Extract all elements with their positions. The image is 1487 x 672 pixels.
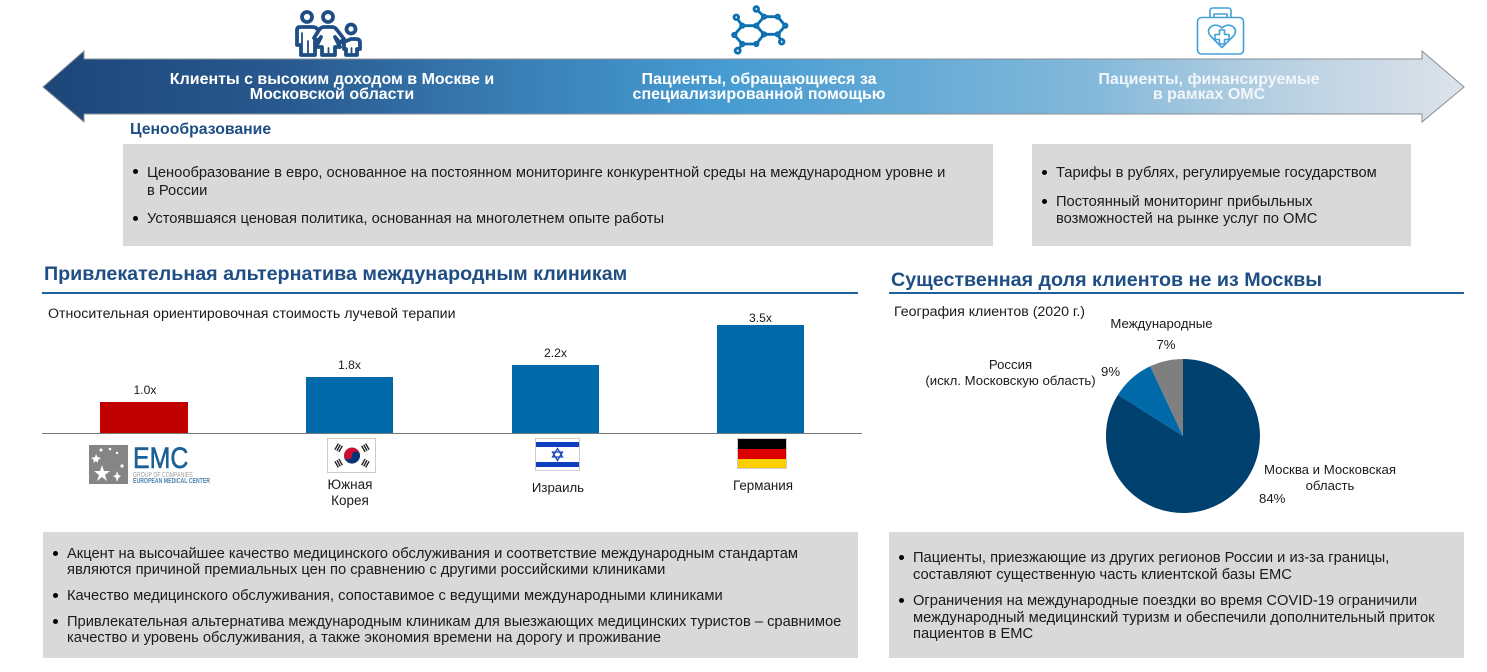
- bullet: monitoring: Постоянный мониторинг прибыльных: [1056, 194, 1313, 210]
- panel: pricing left: [123, 144, 993, 246]
- arrow label: OMS: Пациенты, финансируемые: [1098, 70, 1320, 88]
- pie chart: [1106, 359, 1260, 513]
- segment arrow: [42, 50, 1465, 123]
- value: South Korea: 1.8x: [338, 358, 361, 372]
- bullet: tourists: [67, 614, 841, 646]
- label: South Korea: Корея: [331, 493, 369, 508]
- bullet: euro pricing: [147, 164, 945, 200]
- value: Germany: 3.5x: [749, 311, 772, 325]
- logo: EMC: EMC: [132, 442, 188, 475]
- heading rule right: [889, 292, 1464, 294]
- slice: Moscow 84%: [1106, 359, 1260, 513]
- bullet: euro pricing: в России: [147, 183, 207, 199]
- bullet: comparable: Качество медицинского обслуживания, сопоставимое с ведущими международными клиниками: [67, 588, 723, 604]
- arrow label: specialised care: [633, 70, 885, 102]
- heading rule left: [42, 292, 858, 294]
- bullet: premium: являются причиной премиальных цен по сравнению с другими российскими клиниками: [67, 562, 665, 578]
- bullet: tariffs: Тарифы в рублях, регулируемые государством: [1056, 165, 1377, 181]
- label: Russia: Россия: [989, 357, 1032, 372]
- slice: International 7%: [1150, 359, 1183, 436]
- bar: Israel: [512, 365, 599, 433]
- value: international: 7%: [1156, 337, 1176, 352]
- bullet: covid: пациентов в ЕМС: [913, 626, 1033, 642]
- arrow label: high income: Клиенты с высоким доходом в Москве и: [170, 70, 494, 88]
- chart subtitle: geography: География клиентов (2020 г.): [894, 304, 1085, 320]
- icon: molecule: [731, 5, 788, 55]
- label: Germany: Германия: [733, 478, 793, 493]
- panel: pricing right: [1032, 144, 1411, 246]
- bullet: covid: [913, 593, 1435, 642]
- heading: alternative to international clinics: Привлекательная альтернатива международным клиникам: [44, 263, 627, 285]
- label: Israel: Израиль: [532, 480, 584, 495]
- heading: pricing: Ценообразование: [130, 121, 271, 138]
- value: EMC: 1.0x: [133, 383, 157, 397]
- bar: Germany: [717, 325, 804, 433]
- bullet: regions: [913, 550, 1389, 583]
- bullet: euro pricing: Ценообразование в евро, основанное на постоянном мониторинге конкурентной среды на международном уровне и: [147, 165, 945, 181]
- bullet: premium: [67, 546, 798, 578]
- bullet: regions: составляют существенную часть клиентской базы ЕМС: [913, 566, 1292, 582]
- chart subtitle: Относительная ориентировочная стоимость лучевой терапии: [48, 306, 456, 322]
- icon: family: [295, 10, 362, 57]
- bullet: monitoring: возможностей на рынке услуг по ОМС: [1056, 211, 1317, 227]
- value: Israel: 2.2x: [544, 346, 567, 360]
- bar chart: [42, 325, 862, 434]
- bullet: monitoring: [1056, 194, 1317, 228]
- heading: non-Moscow clients: Существенная доля клиентов не из Москвы: [891, 269, 1322, 291]
- bullet: established pricing: Устоявшаяся ценовая политика, основанная на многолетнем опыте работы: [147, 211, 664, 227]
- slice: Russia 9%: [1118, 366, 1183, 436]
- arrow label: high income: Московской области: [250, 86, 414, 102]
- flag: South Korea: [327, 438, 376, 473]
- panel: client notes: [889, 532, 1464, 658]
- panel: quality notes: [43, 532, 858, 658]
- arrow label: specialised care: специализированной помощью: [633, 86, 885, 102]
- label: Moscow: область: [1306, 478, 1354, 493]
- label: South Korea: [328, 477, 372, 508]
- logo: EMC: EUROPEAN MEDICAL CENTER: [133, 478, 210, 485]
- bullet: tourists: Привлекательная альтернатива международным клиникам для выезжающих медицинских туристов – сравнимое: [67, 614, 841, 630]
- logo: EMC: [89, 442, 210, 485]
- arrow label: specialised care: Пациенты, обращающиеся за: [642, 70, 876, 88]
- arrow label: high income: [170, 70, 494, 102]
- axis: [42, 433, 862, 434]
- bullet: covid: Ограничения на международные поездки во время COVID-19 ограничили: [913, 593, 1417, 609]
- label: international: Международные: [1110, 316, 1213, 331]
- bullet: regions: Пациенты, приезжающие из других регионов России и из-за границы,: [913, 550, 1389, 566]
- arrow label: OMS: [1098, 70, 1320, 102]
- bullet: tourists: качество и уровень обслуживания, а также экономия времени на дорогу и проживание: [67, 630, 661, 646]
- bullet: premium: Акцент на высочайшее качество медицинского обслуживания и соответствие международным стандартам: [67, 546, 798, 562]
- bar: South Korea: [306, 377, 393, 433]
- label: Moscow: Москва и Московская: [1264, 462, 1396, 477]
- label: Russia: [925, 357, 1096, 388]
- label: South Korea: Южная: [328, 477, 372, 492]
- arrow label: OMS: в рамках ОМС: [1153, 86, 1265, 102]
- bullet: covid: международный медицинский туризм и обеспечили дополнительный приток: [913, 610, 1435, 626]
- icon: medical case: [1196, 7, 1244, 55]
- logo: EMC: GROUP OF COMPANIES: [133, 472, 193, 479]
- flag: Israel: [535, 438, 580, 471]
- flag: Germany: [737, 438, 787, 469]
- value: Russia: 9%: [1101, 364, 1120, 379]
- label: Moscow: [1264, 462, 1396, 493]
- bar: EMC: [100, 402, 188, 433]
- label: Russia: (искл. Московскую область): [925, 373, 1096, 388]
- value: Moscow: 84%: [1259, 491, 1285, 506]
